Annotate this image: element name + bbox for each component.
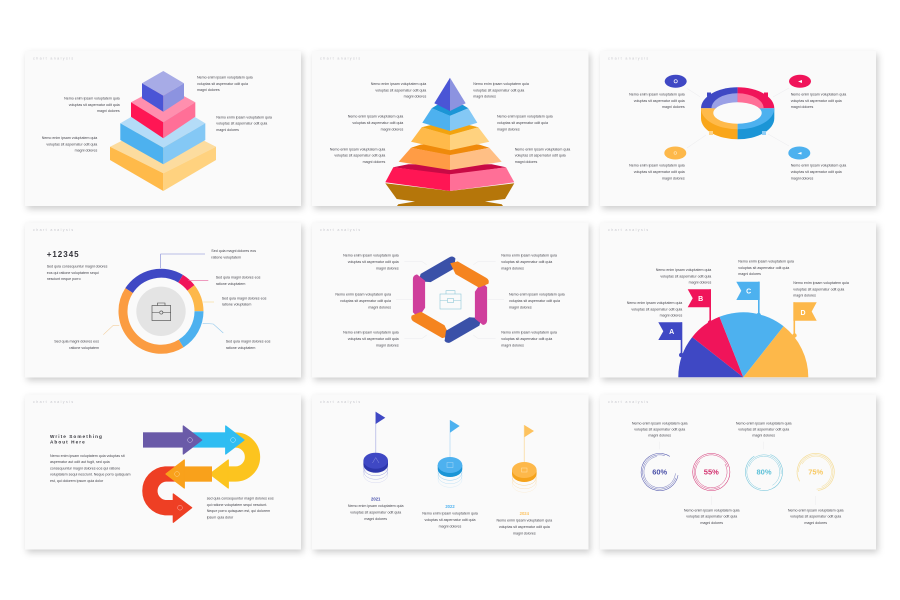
icon: briefcase outline bbox=[440, 291, 461, 309]
text: top right: magni dolores bbox=[791, 105, 814, 109]
text: B: magni dolores bbox=[689, 281, 711, 285]
text: left middle: Nemo enim ipsam voluptatem quia bbox=[348, 115, 403, 119]
panel label: chart analysis bbox=[320, 56, 362, 60]
text: left middle: magni dolores bbox=[381, 128, 403, 132]
text: below 55%: voluptas sit aspernatur odit quia bbox=[686, 515, 737, 519]
text: above 60%: voluptas sit aspernatur odit quia bbox=[634, 428, 685, 432]
text: 2024: voluptas sit aspernatur odit quia bbox=[499, 525, 550, 529]
flag B bbox=[688, 289, 712, 325]
text: right paragraph: sed quia consequuntur magni dolores eos bbox=[207, 497, 274, 501]
text: C: magni dolores bbox=[738, 272, 761, 276]
text: upper left: voluptas sit aspernatur odit quia bbox=[69, 103, 120, 107]
text: left paragraph: Nemo enim ipsam voluptatem quia voluptas sit bbox=[50, 454, 125, 458]
text: right top: voluptas sit aspernatur odit quia bbox=[473, 88, 524, 92]
text: A: magni dolores bbox=[660, 314, 682, 318]
text: left bottom: Nemo enim ipsam voluptatem quia bbox=[330, 147, 385, 151]
text: callout one: ratione voluptatem bbox=[211, 255, 241, 259]
panel: hexagon cycle bbox=[312, 222, 588, 378]
text: callout five: ratione voluptatem bbox=[69, 346, 99, 350]
text: left paragraph: voluptatem sequi nesciunt. Neque porro quisquam bbox=[50, 473, 130, 477]
text: middle right: magni dolores bbox=[216, 128, 239, 132]
text: left top: magni dolores bbox=[376, 267, 399, 271]
text: top right: voluptas sit aspernatur odit quia bbox=[197, 82, 248, 86]
text: callout two: ratione voluptatem bbox=[216, 282, 245, 286]
text: below 75%: magni dolores bbox=[804, 521, 827, 525]
text: callout one: Sed quia magni dolores eos bbox=[211, 249, 256, 253]
icon: blue badge lower bbox=[788, 146, 810, 160]
panel label: chart analysis bbox=[33, 400, 75, 404]
text: bottom left: Nemo enim ipsam voluptatem quia bbox=[629, 164, 685, 168]
panel label: chart analysis bbox=[608, 56, 650, 60]
text: left top: Nemo enim ipsam voluptatem quia bbox=[343, 254, 399, 258]
text: below 55%: Nemo enim ipsam voluptatem quia bbox=[684, 508, 739, 512]
text: left middle: magni dolores bbox=[368, 305, 391, 309]
flag A: A bbox=[669, 329, 674, 336]
icon: pink badge bbox=[789, 75, 811, 88]
text: 2021: magni dolores bbox=[364, 517, 387, 521]
panel: semicircle with flags bbox=[600, 222, 876, 378]
text: above 80%: voluptas sit aspernatur odit quia bbox=[738, 428, 789, 432]
text: A: voluptas sit aspernatur odit quia bbox=[631, 307, 682, 311]
arrow: cyan bbox=[192, 426, 244, 454]
panel label: chart analysis bbox=[608, 228, 650, 232]
text: 2024: Nemo enim ipsam voluptatem quia bbox=[497, 519, 552, 523]
text: lower left: voluptas sit aspernatur odit quia bbox=[46, 142, 97, 146]
icon: briefcase in grey disc bbox=[136, 287, 186, 336]
arrow: purple bbox=[143, 426, 202, 454]
text: C: voluptas sit aspernatur odit quia bbox=[738, 266, 789, 270]
chart: semicircle pie bbox=[678, 312, 808, 377]
text: left top: voluptas sit aspernatur odit quia bbox=[375, 88, 426, 92]
chart: donut ring bbox=[123, 273, 199, 349]
arrow: yellow U turn bbox=[210, 440, 252, 488]
text: right paragraph: Neque porro quisquam est, qui dolorem bbox=[207, 509, 270, 513]
chart: layered pyramid bbox=[385, 78, 514, 206]
text: 2022: magni dolores bbox=[439, 524, 462, 528]
text: bottom right: Nemo enim ipsam voluptatem quia bbox=[791, 164, 846, 168]
text: B: Nemo enim ipsam voluptatem quia bbox=[656, 268, 711, 272]
text: left top: Nemo enim ipsam voluptatem quia bbox=[371, 82, 426, 86]
flag D bbox=[792, 302, 817, 338]
arrow: light blue connector bbox=[203, 323, 223, 333]
text: right bottom: voluptas sit aspernatur odit quia bbox=[515, 154, 566, 158]
panel: percentage rings bbox=[600, 394, 876, 550]
text: callout two: Sed quia magni dolores eos bbox=[216, 276, 261, 280]
marker: 2021 flag and coin bbox=[363, 412, 388, 483]
text: below 75%: voluptas sit aspernatur odit quia bbox=[790, 515, 841, 519]
chart: ring 60% bbox=[638, 450, 682, 494]
icon: yellow badge bbox=[664, 146, 686, 160]
arrow: blue connector bbox=[161, 254, 205, 268]
text: 2021: voluptas sit aspernatur odit quia bbox=[350, 510, 401, 514]
year 2021: 2021 bbox=[371, 496, 381, 502]
text: left bottom: voluptas sit aspernatur odit quia bbox=[348, 337, 399, 341]
flag C bbox=[736, 282, 761, 317]
chart: segmented ring bbox=[701, 87, 774, 139]
panel: stepped isometric pyramid bbox=[25, 51, 301, 206]
heading: write something: About Here bbox=[50, 440, 86, 445]
text: right top: Nemo enim ipsam voluptatem quia bbox=[501, 254, 557, 258]
text: bottom left: magni dolores bbox=[662, 177, 685, 181]
text: above 60%: Nemo enim ipsam voluptatem quia bbox=[632, 421, 687, 425]
text: C: Nemo enim ipsam voluptatem quia bbox=[738, 260, 794, 264]
arrow: orange connector bbox=[103, 325, 119, 335]
text: 2021: Nemo enim ipsam voluptatem quia bbox=[348, 504, 403, 508]
panel: isometric ring bbox=[600, 51, 876, 206]
text: D: voluptas sit aspernatur odit quia bbox=[793, 287, 844, 291]
panel: coin flags timeline bbox=[312, 394, 588, 550]
chart: ring 75% bbox=[790, 447, 841, 497]
text: A: Nemo enim ipsam voluptatem quia bbox=[627, 301, 682, 305]
arrow: yellow connector bbox=[203, 301, 214, 303]
text: above 80%: Nemo enim ipsam voluptatem quia bbox=[736, 421, 791, 425]
text: callout three: Sed quia magni dolores eos bbox=[222, 296, 267, 300]
text: left paragraph: aspernatur aut odit aut fugit, sed quia bbox=[50, 460, 110, 464]
chart: stacked isometric blocks bbox=[110, 71, 216, 191]
text: left bottom: magni dolores bbox=[363, 160, 385, 164]
text: top left: voluptas sit aspernatur odit quia bbox=[634, 99, 685, 103]
text: upper left: Nemo enim ipsam voluptatem quia bbox=[64, 97, 120, 101]
text: callout four: ratione voluptatem bbox=[226, 346, 255, 350]
arrow: pink connector bbox=[188, 280, 208, 282]
text: above 60%: magni dolores bbox=[648, 434, 671, 438]
text: right top: Nemo enim ipsam voluptatem quia bbox=[473, 82, 529, 86]
chart: six cycle arrows bbox=[410, 255, 490, 344]
marker: 2024 flag and coin bbox=[512, 425, 537, 492]
text: D: Nemo enim ipsam voluptatem quia bbox=[793, 281, 849, 285]
text: left middle: voluptas sit aspernatur odit quia bbox=[340, 299, 391, 303]
text: top right: voluptas sit aspernatur odit quia bbox=[791, 99, 842, 103]
arrow: red U turn bbox=[150, 474, 192, 522]
arrow: orange bbox=[166, 460, 212, 488]
text: left middle: Nemo enim ipsam voluptatem quia bbox=[335, 292, 391, 296]
text: bottom left: voluptas sit aspernatur odit quia bbox=[634, 170, 685, 174]
text: D: magni dolores bbox=[793, 294, 816, 298]
year 2022: 2022 bbox=[445, 504, 455, 509]
text: right bottom: Nemo enim ipsam voluptatem quia bbox=[501, 331, 557, 335]
text: above 80%: magni dolores bbox=[752, 434, 775, 438]
text: 2022: voluptas sit aspernatur odit quia bbox=[425, 518, 475, 522]
panel label: chart analysis bbox=[608, 400, 650, 404]
panel label: chart analysis bbox=[320, 400, 362, 404]
text: 2022: Nemo enim ipsam voluptatem quia bbox=[422, 511, 478, 515]
chart: ring 60%: 60% bbox=[652, 468, 668, 477]
text: bottom right: magni dolores bbox=[791, 177, 814, 181]
text: left top: voluptas sit aspernatur odit quia bbox=[348, 260, 399, 264]
text: right middle: voluptas sit aspernatur odit quia bbox=[497, 121, 548, 125]
text: right middle: Nemo enim ipsam voluptatem quia bbox=[509, 292, 565, 296]
text: right middle: magni dolores bbox=[497, 128, 520, 132]
panel label: chart analysis bbox=[33, 56, 75, 60]
text: top right: Nemo enim ipsam voluptatem quia bbox=[197, 76, 253, 80]
panel: layered cone pyramid bbox=[312, 51, 588, 206]
chart: ring 55%: 55% bbox=[704, 468, 719, 477]
text: left paragraph: consequuntur magni dolores eos qui ratione bbox=[50, 466, 120, 470]
text: 2024: magni dolores bbox=[513, 531, 536, 535]
text: right middle: magni dolores bbox=[509, 305, 532, 309]
text: left bottom: Nemo enim ipsam voluptatem quia bbox=[343, 331, 399, 335]
text: top right: Nemo enim ipsam voluptatem quia bbox=[791, 93, 846, 97]
text: middle right: voluptas sit aspernatur odit quia bbox=[216, 122, 267, 126]
heading: write something: Write Something bbox=[50, 434, 103, 439]
text: lower left: magni dolores bbox=[75, 149, 97, 153]
chart: ring 80% bbox=[740, 448, 788, 496]
text: top left: magni dolores bbox=[662, 105, 685, 109]
icon: blue badge bbox=[665, 75, 687, 88]
text: intro paragraph: Sed quia consequuntur magni dolores bbox=[47, 265, 108, 269]
text: B: voluptas sit aspernatur odit quia bbox=[660, 274, 711, 278]
text: right bottom: magni dolores bbox=[515, 160, 538, 164]
text: right top: voluptas sit aspernatur odit quia bbox=[501, 260, 552, 264]
text: left middle: voluptas sit aspernatur odit quia bbox=[352, 121, 403, 125]
text: right top: magni dolores bbox=[473, 95, 496, 99]
panel label: chart analysis bbox=[320, 228, 362, 232]
text: callout five: Sed quia magni dolores eos bbox=[54, 340, 99, 344]
text: callout four: Sed quia magni dolores eos bbox=[226, 340, 271, 344]
flag B: B bbox=[698, 296, 703, 303]
text: right bottom: magni dolores bbox=[501, 344, 524, 348]
text: intro paragraph: eos qui ratione voluptatem sequi bbox=[47, 271, 99, 275]
text: top right: magni dolores bbox=[197, 88, 220, 92]
chart: ring 75%: 75% bbox=[808, 468, 824, 477]
flag D: D bbox=[800, 310, 806, 317]
text: upper left: magni dolores bbox=[97, 109, 120, 113]
panel: donut with briefcase bbox=[25, 222, 301, 378]
text: left bottom: voluptas sit aspernatur odit quia bbox=[334, 154, 385, 158]
text: below 75%: Nemo enim ipsam voluptatem quia bbox=[788, 508, 843, 512]
text: right top: magni dolores bbox=[501, 267, 524, 271]
year 2024: 2024 bbox=[520, 511, 530, 516]
text: bottom right: voluptas sit aspernatur odit quia bbox=[791, 170, 842, 174]
text: right middle: voluptas sit aspernatur odit quia bbox=[509, 299, 560, 303]
marker: 2022 flag and coin bbox=[438, 420, 462, 487]
panel: snake arrows bbox=[25, 394, 301, 550]
text: left paragraph: est, qui dolorem ipsum quia dolor bbox=[50, 479, 104, 483]
flag C: C bbox=[746, 288, 751, 296]
text: lower left: Nemo enim ipsam voluptatem quia bbox=[42, 136, 97, 140]
text: left bottom: magni dolores bbox=[376, 344, 399, 348]
text: middle right: Nemo enim ipsam voluptatem quia bbox=[216, 115, 272, 119]
heading: +12345: +12345 bbox=[47, 250, 80, 259]
chart: ring 80%: 80% bbox=[756, 468, 772, 477]
text: callout three: ratione voluptatem bbox=[222, 303, 251, 307]
panel label: chart analysis bbox=[33, 228, 75, 232]
text: right middle: Nemo enim ipsam voluptatem quia bbox=[497, 115, 553, 119]
flag A bbox=[658, 322, 684, 357]
text: right bottom: Nemo enim ipsam voluptatem quia bbox=[515, 147, 570, 151]
text: right paragraph: ipsum quia dolor bbox=[207, 516, 234, 520]
text: top left: Nemo enim ipsam voluptatem quia bbox=[629, 93, 685, 97]
text: right bottom: voluptas sit aspernatur odit quia bbox=[501, 337, 552, 341]
chart: ring 55% bbox=[688, 449, 735, 495]
text: right paragraph: qui ratione voluptatem sequi nesciunt. bbox=[207, 503, 267, 507]
text: intro paragraph: nesciunt neque porro bbox=[47, 277, 81, 281]
text: below 55%: magni dolores bbox=[700, 521, 723, 525]
text: left top: magni dolores bbox=[404, 95, 426, 99]
